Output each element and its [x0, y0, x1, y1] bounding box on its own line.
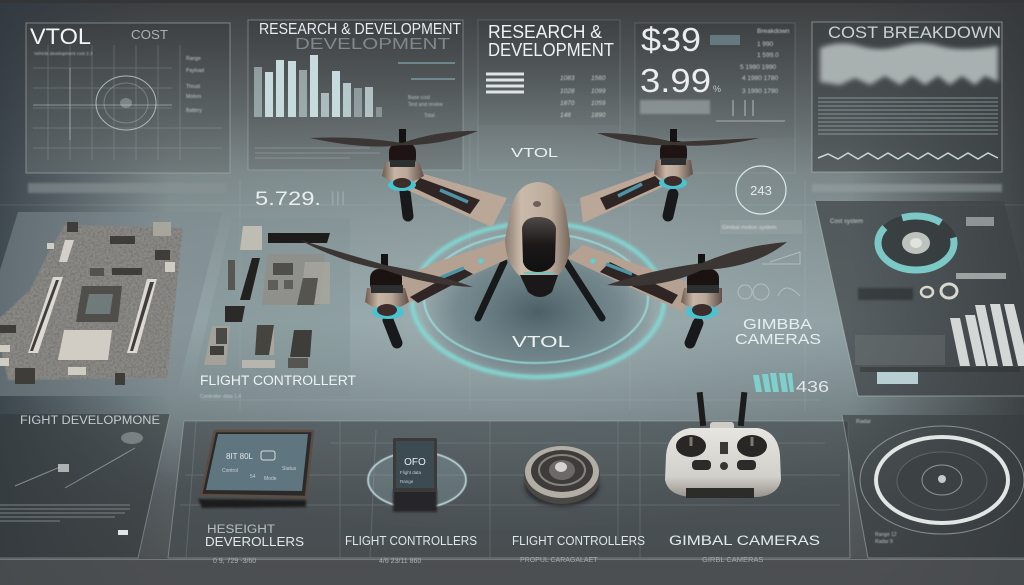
- parts row: [858, 284, 957, 300]
- fuselage: [505, 182, 570, 297]
- panel: cost breakdown: [812, 22, 1002, 172]
- top right note: [966, 217, 994, 226]
- panel: prices: [635, 21, 795, 173]
- motor bottom right: [681, 254, 722, 319]
- heat spreader: [58, 330, 112, 360]
- table: 1059: [591, 100, 606, 107]
- ghost marks: III: [330, 189, 346, 210]
- dial note: Radar 9: [875, 539, 893, 545]
- motor bottom left: [365, 254, 409, 319]
- panel: flight developments: [0, 414, 170, 558]
- text block: [818, 98, 998, 134]
- marker: [118, 530, 128, 535]
- landing legs: [388, 192, 698, 343]
- motor top left: [382, 129, 424, 191]
- heading: research and development: RESEARCH & DEVELOPMENT: [259, 21, 461, 38]
- phone caption: Range: [400, 479, 414, 484]
- phone with ring: [368, 438, 466, 512]
- propeller top right: [597, 133, 760, 146]
- donut chart: [875, 214, 957, 272]
- panel: right dashboard: [815, 201, 1024, 396]
- lower bars: [877, 372, 918, 384]
- propeller top left: [310, 131, 478, 146]
- side notes: [186, 56, 204, 114]
- heading: flight controller: FLIGHT CONTROLLERT: [200, 373, 356, 388]
- sensor: [533, 201, 541, 207]
- memory slots: [28, 277, 63, 353]
- dial title: Radar: [856, 419, 871, 425]
- table: 1099: [591, 88, 606, 95]
- label: VTOL bottom: VTOL: [512, 334, 571, 351]
- bar strip: [640, 100, 754, 116]
- blurred area chart: [820, 43, 998, 85]
- panel: research and development chart: [248, 20, 463, 170]
- circuit board: [0, 222, 183, 385]
- unit: %: [713, 84, 721, 94]
- footnote strip right: [812, 184, 1002, 192]
- heading: RESEARCH &: [488, 21, 603, 42]
- side notes: Payload: [186, 68, 204, 74]
- label: flight controllers 2: FLIGHT CONTROLLERS: [512, 533, 645, 548]
- phone caption: Flight data: [400, 470, 422, 475]
- gauge: circular badge: [736, 166, 786, 214]
- dial note: Range 12: [875, 532, 897, 538]
- line chart: [15, 448, 135, 488]
- text lines: [0, 505, 130, 521]
- stat list: 5 1980 1990: [740, 64, 777, 71]
- sketch: [738, 252, 800, 300]
- chart markers: [58, 432, 143, 472]
- value readout: [255, 189, 346, 210]
- side notes: Thrust: [186, 84, 201, 90]
- small notes: [408, 95, 443, 119]
- propeller bottom right: [607, 242, 787, 286]
- table: 1083: [560, 75, 575, 82]
- lower text block: [255, 148, 380, 158]
- processor: [76, 286, 122, 322]
- tablet readout: [222, 466, 297, 482]
- striped bars: [950, 304, 1024, 366]
- caption: Controller data 1.4: [200, 394, 241, 400]
- tablet readout: 54: [250, 474, 256, 480]
- tablet readout: Control: [222, 468, 238, 474]
- dial note: [875, 532, 897, 545]
- teal bars: [753, 373, 794, 392]
- motors: [365, 129, 722, 319]
- propeller bottom left: [300, 240, 473, 287]
- panel: right column notes: [720, 220, 829, 396]
- propellers: [300, 131, 787, 287]
- stat list: 1 599.0: [757, 52, 779, 59]
- heading: cost: COST: [131, 27, 168, 42]
- caption text: Vehicle development cost 2.3: [34, 51, 93, 56]
- tablet icon: [261, 451, 275, 460]
- arms: [375, 170, 690, 312]
- panel: research and development heading: [478, 20, 620, 170]
- bar chart: [254, 55, 382, 117]
- ring: VTOL landing glow: [412, 223, 664, 377]
- heading: COST BREAKDOWN: [828, 23, 1001, 42]
- tablet screen text: 8IT 80L: [226, 452, 254, 461]
- small notes: Test and review: [408, 102, 443, 108]
- percentage: 3.99: [640, 62, 711, 99]
- label: flight controllers 1: FLIGHT CONTROLLERS: [345, 533, 477, 548]
- table: 1028: [560, 88, 575, 95]
- sublabel: flight controllers 2: PROPUL CARAGALAET: [520, 557, 598, 564]
- tablet readout: Mode: [264, 476, 277, 482]
- lens: [524, 446, 600, 506]
- camera window: [522, 217, 556, 272]
- tablet readout: Status: [282, 466, 297, 472]
- side notes: Motors: [186, 94, 202, 100]
- value: 436: [796, 379, 829, 396]
- heading: VTOL: VTOL: [30, 24, 91, 49]
- price: $39: [641, 21, 701, 58]
- side notes: Battery: [186, 108, 202, 114]
- title note: Cost system: [830, 219, 863, 225]
- heading: cameras: CAMERAS: [735, 331, 821, 348]
- number: 5.729.: [255, 189, 321, 210]
- panel: radar dial: [842, 415, 1024, 558]
- remote controller: [665, 392, 781, 498]
- tablet: [198, 431, 313, 508]
- note: Gimbal motion system: [722, 225, 777, 231]
- stat list: 3 1990 1790: [742, 88, 779, 95]
- ghost heading: DEVELOPMENT: [295, 36, 451, 53]
- heading: gimbal: GIMBBA: [743, 316, 812, 333]
- stat list: Breakdown: [757, 28, 790, 35]
- board components: [204, 226, 330, 368]
- legend bar: [956, 273, 1006, 279]
- panel: products row: [168, 392, 850, 565]
- wave line: [818, 153, 998, 159]
- footnote strip: [28, 183, 226, 193]
- badge value: 243: [750, 183, 772, 198]
- heading line 2: DEVELOPMENT: [488, 39, 614, 60]
- side notes: Range: [186, 56, 201, 62]
- sublabel: gimbal cameras: GIRBL CAMERAS: [702, 555, 763, 564]
- sublabel: developers: 0 9, 729 -3/60: [213, 558, 256, 565]
- camera: [520, 275, 558, 297]
- label: gimbal cameras: GIMBAL CAMERAS: [669, 533, 820, 548]
- small notes: Total: [424, 113, 435, 119]
- table: 1890: [591, 112, 606, 119]
- phone screen text: OFO: [404, 457, 426, 468]
- motor top right: [654, 129, 693, 189]
- table: 146: [560, 112, 571, 119]
- chip: [710, 35, 740, 45]
- slider: [716, 120, 785, 122]
- table: [560, 75, 606, 119]
- stripes: [486, 74, 524, 92]
- panel: flight controller board: [190, 218, 356, 400]
- status lights: [478, 258, 596, 264]
- panel: circuit board left: [0, 212, 222, 396]
- stat list: 4 1980 1780: [742, 75, 779, 82]
- concentric rings: [860, 426, 1024, 534]
- label: VTOL top: VTOL: [511, 145, 558, 160]
- heading: FIGHT DEVELOPMONE: [20, 415, 160, 427]
- stat list: 1 990: [757, 41, 774, 48]
- phone caption: [400, 470, 422, 484]
- mini chart: [398, 63, 455, 79]
- small notes: Base cost: [408, 95, 431, 101]
- table: 1560: [591, 75, 606, 82]
- connectors: [0, 222, 171, 385]
- drone: [300, 129, 787, 343]
- dim blocks: [855, 335, 945, 365]
- sublabel: flight controllers 1: 4/6 23/11 860: [379, 558, 421, 565]
- stat list: [740, 28, 790, 95]
- panel: VTOL cost: [26, 23, 230, 173]
- label: developers line 2: DEVEROLLERS: [205, 534, 304, 549]
- label: research developers: HESEIGHT: [207, 524, 275, 536]
- table: 1870: [560, 100, 575, 107]
